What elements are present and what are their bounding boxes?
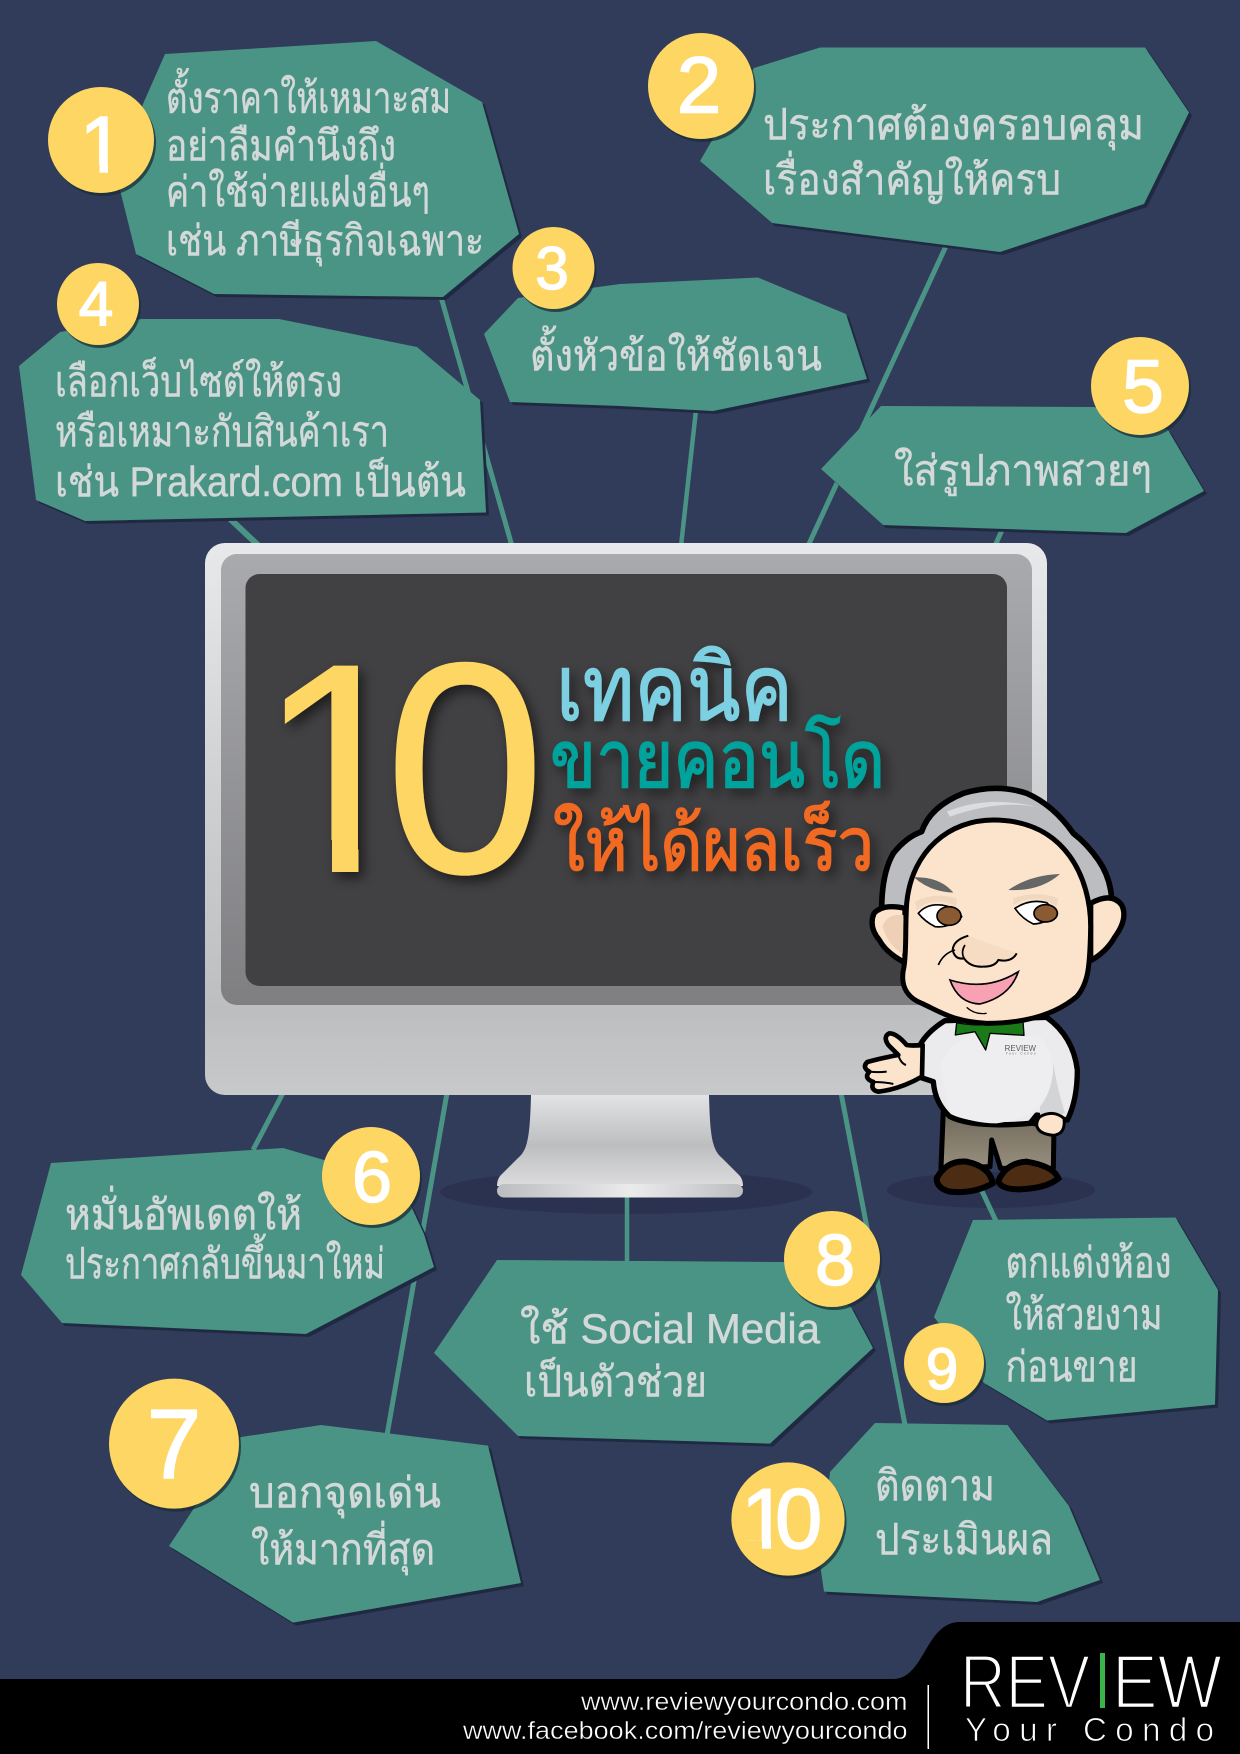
nose xyxy=(953,936,1017,967)
panel: tip 2 xyxy=(648,33,1189,252)
big number 10: 1 xyxy=(256,600,423,936)
connector lines xyxy=(227,246,1002,1435)
panel: tip 4: เช่น Prakard.com เป็นต้น xyxy=(55,457,466,505)
panel: tip 4 xyxy=(19,263,486,521)
collar xyxy=(955,1016,1024,1050)
footer website links: www.facebook.com/reviewyourcondo xyxy=(462,1717,908,1745)
big number 10 xyxy=(284,662,544,886)
panel: tip 7: ให้มากที่สุด xyxy=(251,1521,435,1576)
panel: tip 6: หมั่นอัพเดตให้ xyxy=(65,1186,302,1238)
shirt logo: Your Condo xyxy=(1006,1052,1036,1056)
title line 2: ขายคอนโด xyxy=(550,714,885,804)
shirt xyxy=(918,1017,1077,1125)
panel: tip 8: เป็นตัวช่วย xyxy=(524,1357,707,1405)
panel: tip 6 xyxy=(21,1127,434,1334)
panel: tip 5 xyxy=(821,337,1204,533)
panel: tip 9 xyxy=(904,1218,1218,1420)
ears xyxy=(872,907,905,963)
monitor stand shadow xyxy=(440,1170,812,1214)
eyes xyxy=(918,901,1057,927)
panel: tip 1: ตั้งราคาให้เหมาะสม xyxy=(166,68,451,122)
number 10: 1 xyxy=(741,1472,788,1567)
panel: tip 2: ประกาศต้องครอบคลุม xyxy=(763,101,1144,151)
left hand xyxy=(865,1033,923,1092)
logo: Review Your Condo xyxy=(960,1640,1222,1748)
panel: tip 7: 7 xyxy=(147,1389,201,1499)
panel: tip 6: ประกาศกลับขึ้นมาใหม่ xyxy=(65,1233,385,1287)
monitor stand xyxy=(497,1095,743,1198)
panel: tip 8: ใช้ Social Media xyxy=(520,1305,821,1352)
number 10: 0 xyxy=(775,1472,822,1567)
panel: tip 10: ประเมินผล xyxy=(875,1516,1053,1563)
footer website links xyxy=(462,1688,908,1745)
character mascot xyxy=(865,788,1124,1192)
panel: tip 8 xyxy=(434,1211,880,1444)
eye shading xyxy=(915,894,1058,910)
panel: tip 1: เช่น ภาษีธุรกิจเฉพาะ xyxy=(166,217,484,267)
number 10 xyxy=(746,1488,820,1550)
panel: tip 3: ตั้งหัวข้อให้ชัดเจน xyxy=(530,325,822,379)
panel: tip 5: ใส่รูปภาพสวยๆ xyxy=(894,447,1152,496)
pants xyxy=(941,1110,1054,1168)
panel: tip 10 xyxy=(731,1423,1100,1602)
panel: tip 2: เรื่องสำคัญให้ครบ xyxy=(763,151,1061,204)
big number 10: 0 xyxy=(385,600,545,936)
connector lines below monitor xyxy=(627,1095,996,1262)
panel: tip 3 xyxy=(484,227,867,411)
panel: tip 1: 1 xyxy=(80,100,124,189)
logo: Review Your Condo: EW xyxy=(1112,1640,1222,1725)
logo: Review Your Condo: REV xyxy=(960,1640,1090,1725)
footer bar xyxy=(0,1622,1240,1754)
eyebrows xyxy=(914,877,953,893)
title xyxy=(256,600,885,936)
panel: tip 9: 9 xyxy=(926,1337,958,1402)
footer divider xyxy=(928,1685,929,1749)
panel: tip 8: 8 xyxy=(815,1221,855,1301)
panel: tip 7 xyxy=(109,1379,521,1623)
shoes xyxy=(937,1162,993,1192)
panel: tip 6: 6 xyxy=(352,1138,392,1218)
panel: tip 5: 5 xyxy=(1122,344,1164,428)
hair xyxy=(882,788,1112,937)
title line 3: ให้ได้ผลเร็ว xyxy=(553,802,874,886)
panel: tip 1: ค่าใช้จ่ายแฝงอื่นๆ xyxy=(166,163,430,215)
panel: tip 3: 3 xyxy=(535,235,569,302)
panel: tip 9: ตกแต่งห้อง xyxy=(1006,1239,1172,1286)
panel: tip 2: 2 xyxy=(677,40,721,130)
face xyxy=(903,820,1091,1023)
title line 1: เทคนิค xyxy=(556,638,793,740)
monitor xyxy=(205,543,1047,1198)
panel: tip 4: หรือเหมาะกับสินค้าเรา xyxy=(55,408,389,455)
shirt logo: REVIEW xyxy=(1005,1043,1036,1053)
panel: tip 7: บอกจุดเด่น xyxy=(249,1469,441,1519)
right hand xyxy=(1037,1113,1064,1135)
panel: tip 10: ติดตาม xyxy=(875,1462,995,1509)
panel: tip 9: ให้สวยงาม xyxy=(1006,1291,1162,1338)
panel: tip 1: อย่าลืมคำนึงถึง xyxy=(166,122,396,169)
panel: tip 1 xyxy=(48,41,519,297)
panel: tip 4: เลือกเว็บไซต์ให้ตรง xyxy=(55,357,342,405)
footer website links: www.reviewyourcondo.com xyxy=(580,1688,908,1716)
character shadow xyxy=(887,1172,1095,1208)
logo: Review Your Condo: Your Condo xyxy=(965,1711,1221,1748)
panel: tip 9: ก่อนขาย xyxy=(1006,1343,1138,1390)
mouth xyxy=(950,972,1018,1004)
panel: tip 4: 4 xyxy=(79,270,113,339)
